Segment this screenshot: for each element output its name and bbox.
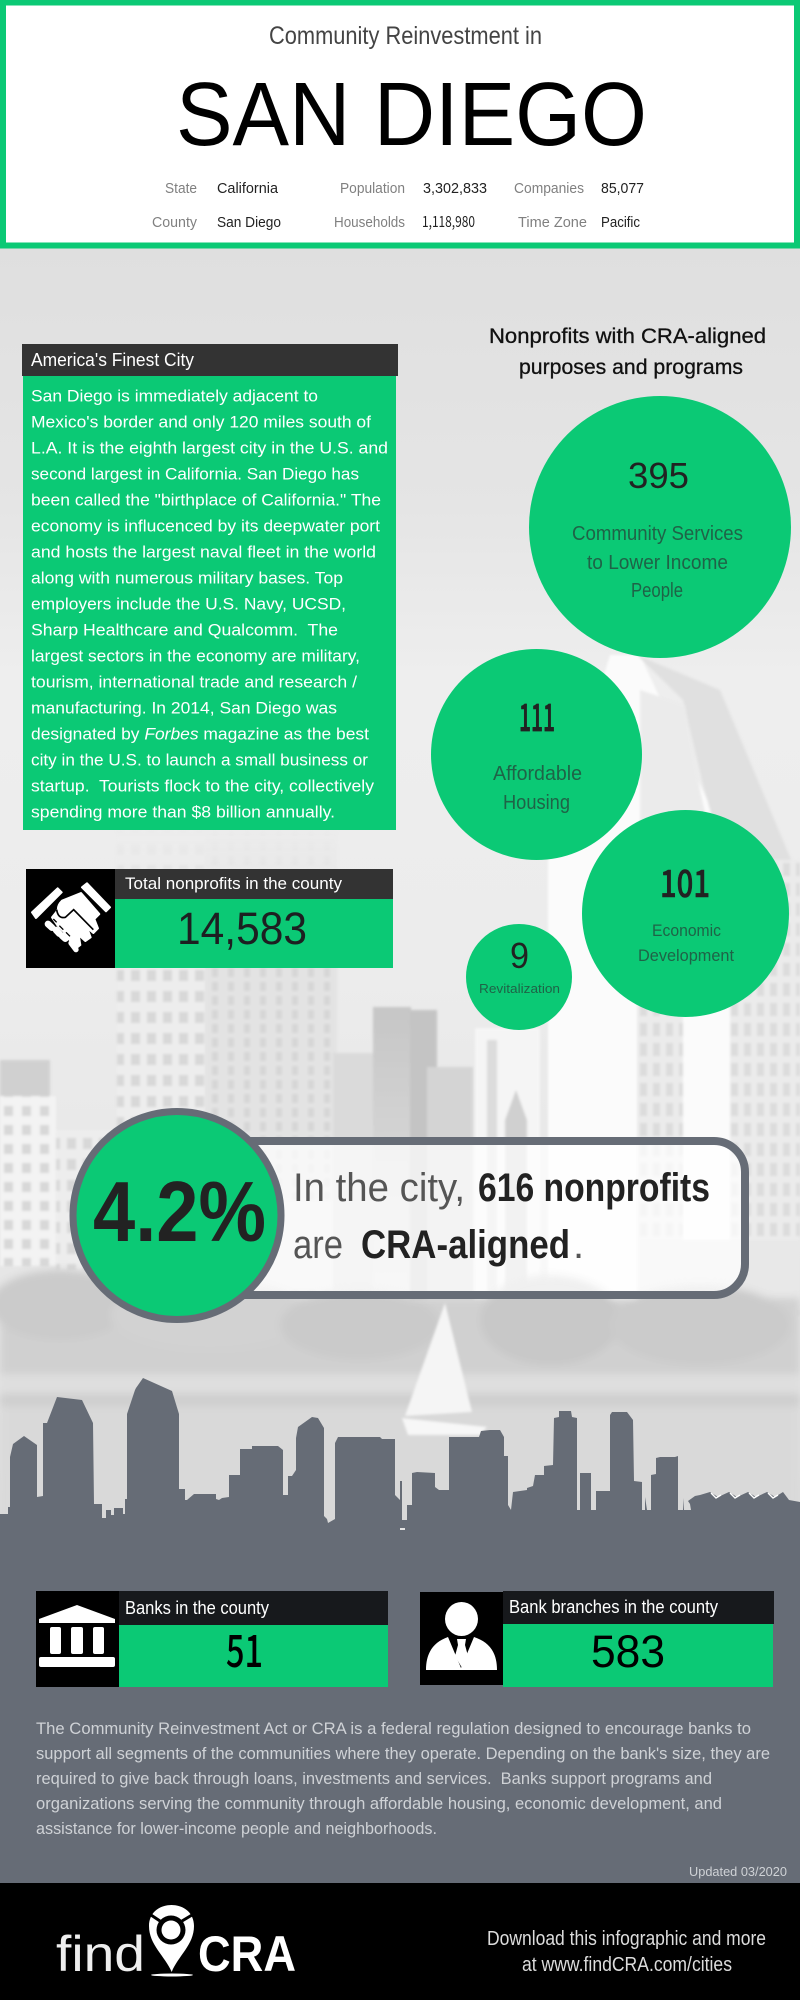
icon: handshake bbox=[26, 869, 115, 968]
facts table: 85,077 bbox=[601, 180, 644, 197]
panel body text: designated by Forbes magazine as the best bbox=[31, 724, 369, 744]
panel body text: San Diego is immediately adjacent to bbox=[31, 386, 318, 406]
panel body text: L.A. It is the eighth largest city in the U.S. and bbox=[31, 438, 388, 458]
callout box: CRA-aligned bbox=[361, 1223, 570, 1267]
facts table: Time Zone bbox=[518, 214, 587, 231]
facts table: Households bbox=[334, 214, 405, 231]
skyline silhouette and lower panel bbox=[0, 1378, 800, 1884]
callout box: are bbox=[293, 1223, 343, 1267]
download call to action: Download this infographic and more bbox=[487, 1928, 766, 1950]
facts table: Population bbox=[340, 180, 405, 197]
facts table: State bbox=[165, 180, 197, 197]
facts table bbox=[152, 180, 644, 232]
card label bar: Bank branches in the county bbox=[509, 1597, 718, 1617]
heading: nonprofits with CRA-aligned purposes: purposes and programs bbox=[519, 356, 743, 379]
text block: about the Community Reinvestment Act: assistance for lower-income people and neighborhoods. bbox=[36, 1819, 437, 1838]
bubble: community services bbox=[529, 396, 791, 658]
panel body text: spending more than $8 billion annually. bbox=[31, 802, 335, 822]
facts table: San Diego bbox=[217, 214, 281, 231]
callout box: In the city, bbox=[293, 1166, 465, 1210]
panel heading bbox=[22, 344, 398, 376]
card value: 51 bbox=[226, 1615, 263, 1680]
text block: about the Community Reinvestment Act: The Community Reinvestment Act or CRA is a federal regulation designed to encourage banks to bbox=[36, 1719, 751, 1738]
background photo: San Diego skyline in grayscale bbox=[0, 248, 800, 1548]
percentage badge: 4.2% bbox=[93, 1165, 266, 1260]
callout box: 616 nonprofits bbox=[478, 1166, 710, 1210]
text block: about the Community Reinvestment Act: required to give back through loans, investments and services. Banks support programs and bbox=[36, 1769, 712, 1788]
facts table: Companies bbox=[514, 180, 584, 197]
card value bbox=[115, 899, 393, 968]
download call to action: at www.findCRA.com/cities bbox=[522, 1954, 732, 1976]
title: SAN DIEGO bbox=[176, 65, 647, 165]
bubble: community services: 395 bbox=[628, 455, 689, 496]
panel body text: Mexico's border and only 120 miles south of bbox=[31, 412, 371, 432]
facts table: California bbox=[217, 180, 279, 197]
bubble: revitalization: Revitalization bbox=[479, 981, 560, 996]
stat card: bank branches in the county bbox=[420, 1591, 774, 1687]
card label bar bbox=[119, 1591, 388, 1625]
text block: about the Community Reinvestment Act: support all segments of the communities where they operate. Depending on the bank's size, they are bbox=[36, 1744, 770, 1763]
bubble: affordable housing: Housing bbox=[503, 792, 570, 814]
facts table: 3,302,833 bbox=[423, 180, 487, 197]
panel body text: Sharp Healthcare and Qualcomm. The bbox=[31, 620, 338, 640]
facts table: Pacific bbox=[601, 214, 640, 231]
bubble: economic development: Economic bbox=[652, 921, 721, 940]
panel body text: city in the U.S. to launch a small business or bbox=[31, 750, 368, 770]
header panel bbox=[3, 2, 797, 246]
updated date: Updated 03/2020 bbox=[689, 1864, 787, 1879]
logo: findCRA: CRA bbox=[198, 1926, 296, 1982]
panel body text: economy is influcenced by its deepwater port bbox=[31, 516, 380, 536]
panel body text: along with numerous military bases. Top bbox=[31, 568, 343, 588]
panel body text: been called the "birthplace of California." The bbox=[31, 490, 381, 510]
logo: findCRA bbox=[56, 1905, 296, 1982]
text block: about the Community Reinvestment Act bbox=[36, 1719, 770, 1838]
callout: 4.2% of nonprofits are CRA-aligned bbox=[73, 1112, 745, 1320]
bubble: community services: People bbox=[631, 580, 683, 602]
stat card: total nonprofits in the county bbox=[26, 869, 393, 968]
card label bar bbox=[115, 869, 393, 899]
footer band bbox=[0, 1883, 800, 2000]
text block: about the Community Reinvestment Act: organizations serving the community through affordable housing, economic development, and bbox=[36, 1794, 722, 1813]
download call to action bbox=[487, 1928, 766, 1976]
percentage badge bbox=[73, 1112, 281, 1320]
bubble: affordable housing bbox=[431, 649, 642, 860]
panel body text: employers include the U.S. Navy, UCSD, bbox=[31, 594, 346, 614]
bubble: economic development: Development bbox=[638, 946, 734, 965]
callout box: . bbox=[573, 1223, 584, 1267]
bubble: community services: Community Services bbox=[572, 523, 743, 545]
card label bar: Banks in the county bbox=[125, 1598, 269, 1618]
card value: 14,583 bbox=[177, 903, 307, 954]
panel heading: America's Finest City bbox=[31, 350, 194, 370]
card value bbox=[119, 1615, 388, 1687]
bubble: affordable housing: 111 bbox=[519, 687, 555, 742]
panel body text: second largest in California. San Diego has bbox=[31, 464, 359, 484]
card value bbox=[503, 1624, 773, 1687]
bubble: economic development bbox=[582, 810, 789, 1017]
card label bar: Total nonprofits in the county bbox=[125, 874, 342, 893]
heading: nonprofits with CRA-aligned purposes bbox=[489, 325, 766, 379]
panel body text: and hosts the largest naval fleet in the world bbox=[31, 542, 376, 562]
panel body text: tourism, international trade and research / bbox=[31, 672, 357, 692]
subtitle: Community Reinvestment in bbox=[269, 22, 542, 50]
panel: America's Finest City bbox=[22, 344, 398, 830]
icon: location pin bbox=[149, 1905, 194, 1976]
icon: bank bbox=[36, 1591, 119, 1687]
stat card: banks in the county bbox=[36, 1591, 388, 1687]
icon: person in suit bbox=[420, 1592, 503, 1685]
panel body text: manufacturing. In 2014, San Diego was bbox=[31, 698, 337, 718]
panel body text bbox=[23, 376, 396, 830]
facts table: County bbox=[152, 214, 197, 231]
callout box bbox=[205, 1141, 745, 1295]
bubble: revitalization bbox=[466, 924, 572, 1030]
panel body text: startup. Tourists flock to the city, collectively bbox=[31, 776, 375, 796]
panel body text: largest sectors in the economy are military, bbox=[31, 646, 360, 666]
bubble: community services: to Lower Income bbox=[587, 552, 728, 574]
bubble: affordable housing: Affordable bbox=[493, 763, 582, 785]
logo: findCRA: find bbox=[56, 1926, 145, 1982]
bubble: economic development: 101 bbox=[660, 853, 710, 908]
card label bar bbox=[503, 1591, 774, 1624]
card value: 583 bbox=[591, 1626, 665, 1677]
heading: nonprofits with CRA-aligned purposes: Nonprofits with CRA-aligned bbox=[489, 325, 766, 348]
bubble: revitalization: 9 bbox=[510, 935, 529, 976]
facts table: 1,118,980 bbox=[422, 211, 475, 232]
